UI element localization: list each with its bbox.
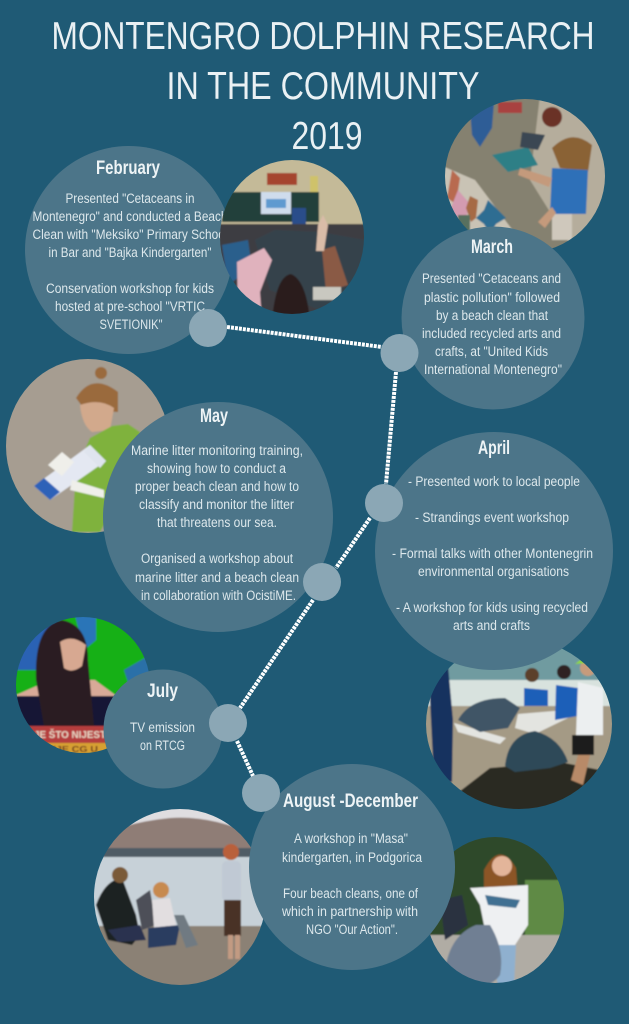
text block: April: - Formal talks with other Montenegrin xyxy=(392,546,593,561)
photo: family cleaning beach xyxy=(94,809,264,985)
text block: March: plastic pollution" followed xyxy=(424,290,560,305)
text block: April: - Strandings event workshop xyxy=(415,510,569,525)
text block: May: proper beach clean and how to xyxy=(135,479,299,494)
text block: May xyxy=(131,443,303,603)
timeline: dotted connector xyxy=(227,327,396,776)
text block: February: Presented "Cetaceans in xyxy=(66,191,194,206)
text block: July: on RTCG xyxy=(140,738,185,753)
text block: April: arts and crafts xyxy=(453,618,530,633)
photo: girl with rubbish bag xyxy=(430,837,564,983)
photo: classroom xyxy=(220,160,364,314)
text block: May: marine litter and a beach clean xyxy=(135,570,299,585)
text block: March: Presented "Cetaceans and xyxy=(422,271,561,286)
text block: February: Clean with "Meksiko" Primary School xyxy=(32,227,228,242)
heading: April: April xyxy=(478,438,510,459)
photo: TV emission: ACIJE CG U xyxy=(38,745,98,754)
panel: May xyxy=(103,402,333,632)
text block: May: in collaboration with OcistiME. xyxy=(141,588,296,603)
text block: February: Conservation workshop for kids xyxy=(46,281,214,296)
panel: February xyxy=(25,146,233,354)
title: 2019 xyxy=(292,115,362,158)
text block: March: crafts, at "United Kids xyxy=(435,344,548,359)
text block: August to December: Four beach cleans, one of xyxy=(283,886,418,901)
heading: February: February xyxy=(96,158,160,179)
text block: April: environmental organisations xyxy=(418,564,569,579)
panel: August to December xyxy=(249,764,455,970)
text block: May: showing how to conduct a xyxy=(147,461,286,476)
photo: woman with clipboard xyxy=(6,359,164,533)
text block: February xyxy=(32,191,228,332)
photo: TV emission xyxy=(16,617,148,753)
title: IN THE COMMUNITY xyxy=(166,65,480,108)
panel: April xyxy=(375,432,613,670)
text block: April: - Presented work to local people xyxy=(408,474,580,489)
text block: April: - A workshop for kids using recycled xyxy=(396,600,588,615)
text block: February: SVETIONIK" xyxy=(100,317,163,332)
timeline nodes xyxy=(189,309,418,812)
text block: July: TV emission xyxy=(130,720,195,735)
text block: March: International Montenegro" xyxy=(424,362,562,377)
panel: March xyxy=(402,226,584,410)
text block: May: that threatens our sea. xyxy=(157,515,277,530)
heading: May: May xyxy=(200,406,228,427)
text block: August to December: NGO "Our Action". xyxy=(306,922,398,937)
panel: July xyxy=(104,670,222,788)
photo: TV emission: JE ŠTO NIJEST xyxy=(34,728,106,741)
text block: August to December: which in partnership with xyxy=(281,904,418,919)
text block: March xyxy=(422,271,562,377)
text block: March: by a beach clean that xyxy=(436,308,548,323)
text block: May: Organised a workshop about xyxy=(141,551,293,566)
text block: May: Marine litter monitoring training, xyxy=(131,443,303,458)
text block: July xyxy=(130,720,195,753)
text block: March: included recycled arts and xyxy=(422,326,561,341)
text block: April xyxy=(392,474,593,633)
text block: February: hosted at pre-school "VRTIC xyxy=(55,299,205,314)
text block: August to December: A workshop in "Masa" xyxy=(294,831,408,846)
heading: March: March xyxy=(471,237,513,258)
text block: February: in Bar and "Bajka Kindergarten" xyxy=(48,245,212,260)
title xyxy=(52,15,594,158)
photo: beach arts and crafts xyxy=(445,99,605,248)
heading: July: July xyxy=(147,681,178,702)
text block: May: classify and monitor the litter xyxy=(139,497,294,512)
photo: turtle model on beach xyxy=(426,648,612,809)
text block: August to December: kindergarten, in Podgorica xyxy=(282,850,422,865)
text block: August to December xyxy=(281,831,422,937)
heading: August to December: August -December xyxy=(283,791,418,812)
text block: February: Montenegro" and conducted a Beach xyxy=(32,209,228,224)
